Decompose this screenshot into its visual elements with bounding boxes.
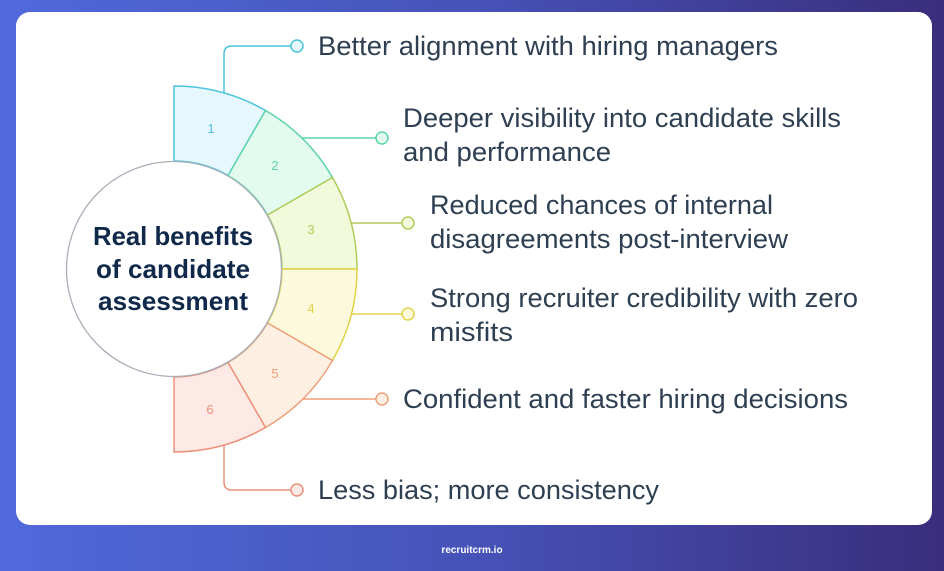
center circle title: assessment	[98, 286, 248, 316]
segment 1	[174, 86, 266, 176]
segment 2: 2	[271, 158, 279, 173]
segment 3: 3	[307, 222, 315, 237]
benefit texts: Deeper visibility into candidate skills	[403, 103, 841, 133]
segment 6	[174, 362, 266, 452]
footer: recruitcrm.io	[441, 545, 503, 556]
center circle title: of candidate	[96, 254, 250, 284]
segment 3	[268, 178, 357, 269]
benefit texts: Reduced chances of internal	[430, 190, 773, 220]
connector 4	[351, 308, 414, 320]
connector 2	[302, 132, 388, 144]
segment 2	[228, 110, 332, 215]
segment 1: 1	[207, 121, 215, 136]
benefit texts: Better alignment with hiring managers	[318, 31, 778, 61]
connector 1	[224, 40, 303, 94]
benefit texts: disagreements post-interview	[430, 224, 788, 254]
benefit texts: misfits	[430, 317, 513, 347]
segment 6: 6	[206, 402, 214, 417]
center circle title: Real benefits	[93, 221, 253, 251]
segment 5	[228, 323, 332, 428]
benefit texts: and performance	[403, 137, 611, 167]
segment 4	[268, 269, 357, 360]
segment 4: 4	[307, 301, 315, 316]
segment 5: 5	[271, 366, 279, 381]
benefit texts: Less bias; more consistency	[318, 475, 659, 505]
benefit texts: Strong recruiter credibility with zero	[430, 283, 858, 313]
center circle title	[66, 162, 282, 376]
connector 3	[351, 217, 414, 229]
connector 6	[224, 444, 303, 496]
benefit texts	[318, 31, 858, 505]
connector 5	[302, 393, 388, 405]
benefit texts: Confident and faster hiring decisions	[403, 384, 848, 414]
